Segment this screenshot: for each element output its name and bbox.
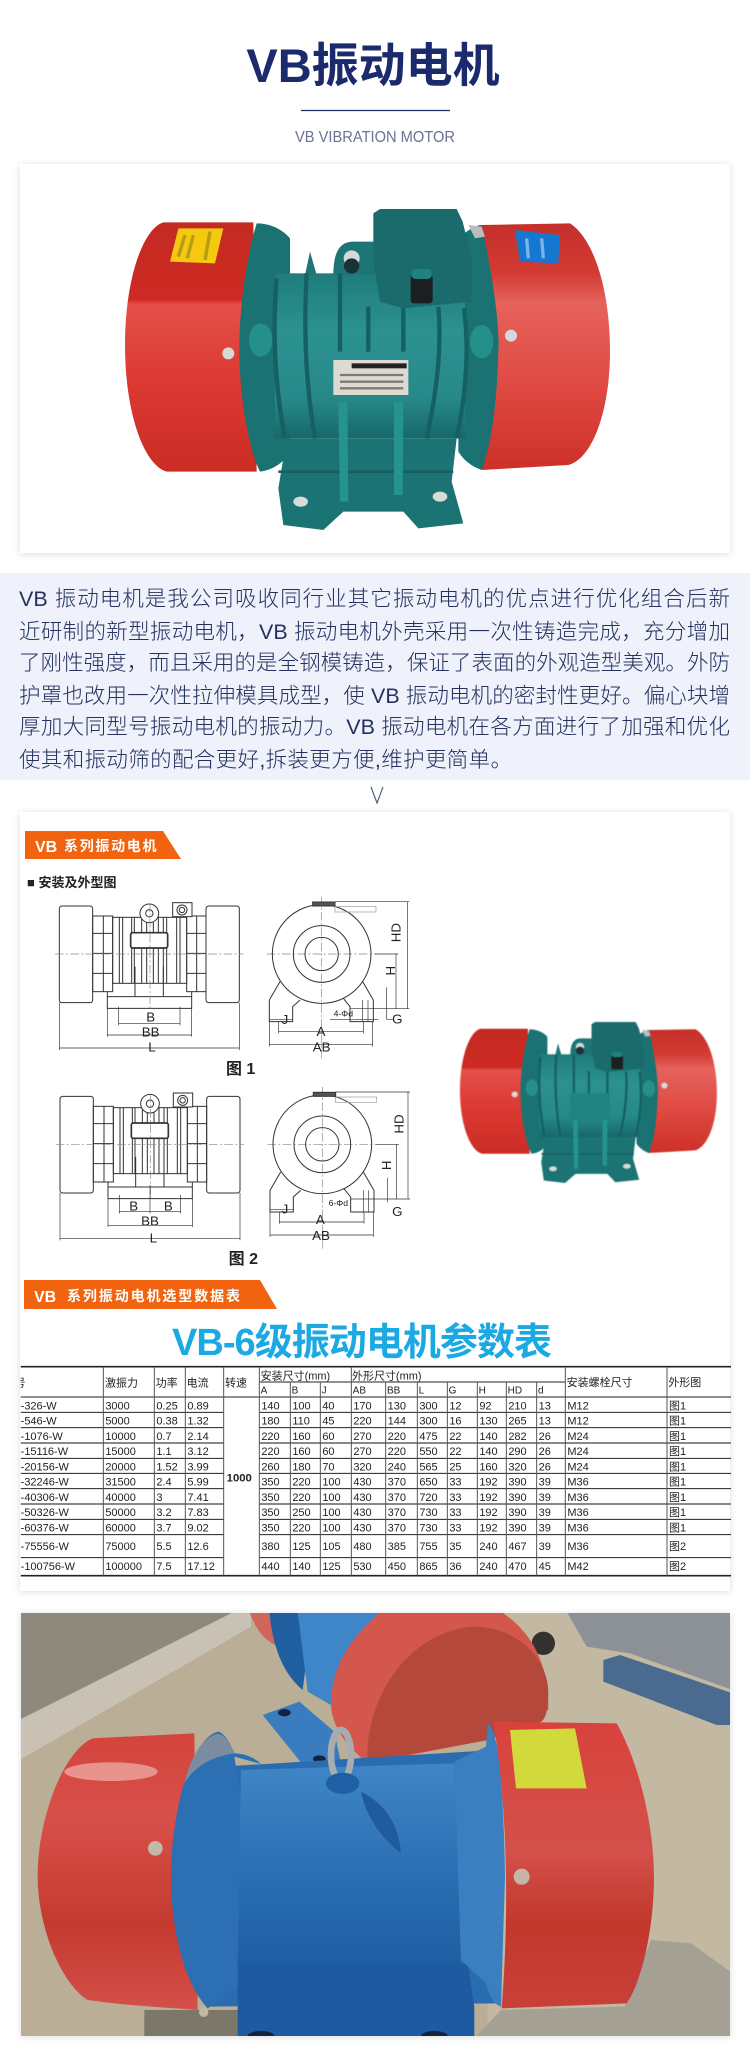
table rows: M24 [567,1431,589,1443]
table header: G [449,1386,457,1397]
table rows: 图2 [669,1560,686,1573]
table rows: 350 [261,1522,280,1534]
table rows: 70 [322,1461,335,1473]
front motor: right drum [493,1722,654,2008]
table rows: M12 [567,1401,589,1413]
table header: 安装螺栓尺寸 [567,1375,633,1389]
table rows: 220 [388,1446,406,1458]
table rows: 370 [388,1522,406,1534]
table rows: 26 [539,1446,551,1458]
table header: HD [508,1386,522,1397]
table rows: 390 [508,1492,527,1504]
table rows: 图1 [669,1491,686,1504]
table rows: 475 [419,1431,438,1443]
labels: figure 1 dimensions: 4-Φd [334,1009,353,1019]
panel: field photo of blue motors [21,1613,730,2036]
ground shadow lower right [474,1940,733,2038]
table rows: 140 [479,1446,498,1458]
table rows [21,1400,686,1573]
table rows: -100756-W [21,1561,76,1573]
table rows: 350 [261,1477,280,1489]
table rows: 7.41 [187,1492,209,1504]
table rows: -1076-W [21,1431,63,1443]
table rows: 12 [449,1401,462,1413]
table rows: 250 [292,1507,311,1519]
banner: VB series [25,831,181,859]
table rows: 470 [508,1561,527,1573]
table rows: 3.2 [156,1507,172,1519]
table rows: 2.14 [187,1431,209,1443]
table rows: 350 [261,1492,280,1504]
table rows: 240 [388,1461,406,1473]
table rows: 3000 [105,1401,130,1413]
table rows: 180 [261,1416,280,1428]
table rows: 192 [479,1492,498,1504]
table rows: 320 [508,1461,527,1473]
table rows: 265 [508,1416,527,1428]
table rows: -546-W [21,1416,57,1428]
labels: figure 1 dimensions: A [317,1024,326,1039]
table rows: 图1 [669,1476,686,1489]
flange interior [184,1734,234,1783]
table rows: 125 [322,1561,341,1573]
table rows: 100 [322,1477,341,1489]
table header: 安装尺寸(mm) [261,1368,330,1382]
table rows: 12.6 [187,1541,209,1553]
table rows: 430 [353,1507,372,1519]
illustration: small motor [460,1022,717,1183]
dark fitting [532,1632,555,1655]
table rows: M12 [567,1416,589,1428]
table rows: 图1 [669,1460,686,1473]
drawing: figure 2 [56,1087,410,1249]
icon: down chevron [370,786,384,804]
plank [19,1612,251,1760]
table header: 功率 [156,1376,178,1390]
table rows: 100000 [105,1561,142,1573]
table rows: 220 [292,1477,311,1489]
table rows: 26 [539,1431,551,1443]
table rows: 220 [261,1431,280,1443]
table rows: 650 [419,1477,438,1489]
table rows: 40000 [105,1492,136,1504]
table rows: 图1 [669,1400,686,1413]
table rows: 370 [388,1507,406,1519]
table rows: 210 [508,1401,527,1413]
table rows: 9.02 [187,1522,209,1534]
table rows: 60 [322,1446,335,1458]
title: VB振动电机 [246,39,500,92]
table rows: 192 [479,1507,498,1519]
text block: description: VB 振动电机是我公司吸收同行业其它振动电机的优点进行优化组合后新 [19,587,730,611]
table rows: 25 [449,1461,462,1473]
table rows: 1.52 [156,1461,178,1473]
table rows: 467 [508,1541,527,1553]
table rows: 1.32 [187,1416,209,1428]
table rows: 240 [479,1541,498,1553]
table rows: 220 [353,1416,372,1428]
table rows: 385 [388,1541,406,1553]
text block: description: 使其和振动筛的配合更好,拆装更方便,维护更简单。 [19,748,512,772]
table header: J [322,1386,327,1397]
table rows: 0.7 [156,1431,172,1443]
text block: description: 近研制的新型振动电机，VB 振动电机外壳采用一次性铸造完成，充分增加 [19,620,730,644]
merged speed cell: 1000 [227,1472,252,1484]
table header: AB [353,1386,366,1397]
heading: installation drawings: ■ 安装及外型图 [27,875,116,890]
table header: 外形尺寸(mm) [352,1368,422,1382]
labels: figure 1 dimensions: 图 1 [226,1061,255,1078]
front motor: backing [208,1750,498,2007]
table header: H [479,1386,486,1397]
labels: figure 2 dimensions [129,1114,406,1268]
yellow label [510,1728,587,1788]
rear motor [249,1612,548,1767]
panel: main product photo [20,164,730,553]
labels: figure 2 dimensions: HD [391,1114,406,1134]
front motor: left flange [171,1732,261,2008]
table rows: 100 [292,1401,311,1413]
text block: description: 了刚性强度，而且采用的是全钢模铸造，保证了表面的外观造型美观。外防 [19,651,730,675]
table rows: 7.83 [187,1507,209,1519]
table rows: 13 [539,1416,551,1428]
drum highlight [64,1762,158,1781]
table rows: 10000 [105,1431,136,1443]
table rows: 240 [479,1561,498,1573]
labels: figure 1 dimensions: B [146,1010,155,1025]
table rows: M36 [567,1492,589,1504]
table rows: 720 [419,1492,438,1504]
table header: A [261,1386,268,1397]
table rows: 100 [322,1507,341,1519]
table title: VB-6级振动电机参数表 [172,1322,552,1364]
table rows: 3.12 [187,1446,209,1458]
illustration: VB vibration motor [125,209,610,530]
label: yellow warning [170,228,223,263]
table rows: 130 [388,1401,406,1413]
front motor: left drum [38,1733,198,2010]
table rows: 390 [508,1477,527,1489]
table rows: 430 [353,1492,372,1504]
table rows: 22 [449,1431,462,1443]
table rows: 480 [353,1541,372,1553]
table rows: 92 [479,1401,492,1413]
header: title block [246,39,500,146]
table rows: 125 [292,1541,311,1553]
table rows: 35 [449,1541,462,1553]
text block: description: 护罩也改用一次性拉伸模具成型，使 VB 振动电机的密封性更好。偏心块增 [19,684,730,708]
labels: figure 2 dimensions: 6-Φd [329,1198,348,1208]
front motor: right band [454,1723,505,2007]
table rows: 33 [449,1492,462,1504]
table rows: 192 [479,1522,498,1534]
table rows: 220 [292,1522,311,1534]
table rows: 13 [539,1401,551,1413]
table rows: -75556-W [21,1541,70,1553]
labels: figure 2 dimensions: J [282,1201,288,1216]
table rows: 60000 [105,1522,136,1534]
table rows: 160 [292,1431,311,1443]
banner: VB series: VB [35,839,57,856]
table rows: 140 [261,1401,280,1413]
text block: description [19,587,730,772]
table rows: 220 [261,1446,280,1458]
front motor: base [238,1963,474,2038]
table rows: 3.99 [187,1461,209,1473]
machinery background [567,1612,733,1725]
table rows: 565 [419,1461,438,1473]
table header: L [419,1386,425,1397]
table rows: 530 [353,1561,372,1573]
table rows: 110 [292,1416,310,1428]
table header: BB [387,1386,401,1397]
table rows: 26 [539,1461,551,1473]
table rows: 160 [479,1461,498,1473]
ground right tone [488,1612,733,2038]
upper-left concrete [19,1612,234,1720]
table rows: 33 [449,1522,462,1534]
parameter table [15,1367,731,1576]
table rows: 390 [508,1522,527,1534]
table rows: 17.12 [187,1561,215,1573]
table rows: 180 [292,1461,311,1473]
photo scene [19,1612,733,2041]
table rows: 图1 [669,1430,686,1443]
table rows: 220 [292,1492,311,1504]
table rows: 图1 [669,1521,686,1534]
table rows: 图1 [669,1415,686,1428]
table rows: 260 [261,1461,280,1473]
table rows: 45 [322,1416,335,1428]
table header: B [292,1386,299,1397]
table rows: 170 [353,1401,372,1413]
table rows: 39 [539,1477,551,1489]
bolts [148,1841,530,2017]
drawing: figure 1 [55,897,409,1058]
table rows: 865 [419,1561,438,1573]
table rows: 730 [419,1507,438,1519]
table rows: 0.38 [156,1416,178,1428]
labels: figure 1 dimensions: L [148,1040,156,1055]
table rows: 图2 [669,1540,686,1553]
table rows: 40 [322,1401,335,1413]
ground [19,1612,733,2038]
table rows: M42 [567,1561,589,1573]
table rows: 220 [388,1431,406,1443]
banner: selection table: 系列振动电机选型数据表 [67,1288,242,1304]
table header: 外形图 [668,1376,701,1389]
panel: description background [0,573,750,780]
table rows: 550 [419,1446,438,1458]
panel: drawings and parameter table [20,812,730,1591]
table rows: 390 [508,1507,527,1519]
table header: 电流 [187,1376,209,1390]
table rows: 270 [353,1446,372,1458]
table rows: 2.4 [156,1477,172,1489]
text block: description: 厚加大同型号振动电机的振动力。VB 振动电机在各方面进行了加强和优化 [19,715,730,739]
table header [20,1370,700,1394]
table rows: -20156-W [21,1461,70,1473]
labels: figure 2 dimensions: L [150,1230,157,1245]
table rows: 320 [353,1461,372,1473]
table rows: 144 [388,1416,406,1428]
table rows: 140 [479,1431,498,1443]
table rows: 0.25 [156,1401,178,1413]
table rows: 290 [508,1446,527,1458]
labels: figure 2 dimensions: 图 2 [229,1251,258,1268]
table rows: M36 [567,1541,589,1553]
lifting eye [326,1730,359,1794]
eye shadow [361,1792,401,1853]
labels: figure 1 dimensions: AB [313,1039,331,1054]
table rows: 270 [353,1431,372,1443]
table rows: 33 [449,1507,462,1519]
table rows: 380 [261,1541,280,1553]
table rows: 440 [261,1561,280,1573]
table rows: 430 [353,1477,372,1489]
table rows: -326-W [21,1401,57,1413]
table rows: 16 [449,1416,462,1428]
table header: 转速 [225,1376,247,1390]
labels: figure 1 dimensions: J [282,1012,288,1027]
subtitle: VB VIBRATION MOTOR [295,129,455,146]
table rows: 350 [261,1507,280,1519]
table rows: 45 [539,1561,551,1573]
table rows: 22 [449,1446,462,1458]
table header: d [538,1386,544,1397]
table rows: 图1 [669,1445,686,1458]
teal plate [570,1093,610,1120]
table rows: 0.89 [187,1401,209,1413]
table rows: 36 [449,1561,462,1573]
table rows: 140 [292,1561,311,1573]
table rows: 300 [419,1401,438,1413]
table rows: M24 [567,1446,589,1458]
labels: figure 2 dimensions: H [379,1161,394,1170]
front motor: body [238,1763,461,1963]
table rows: -60376-W [21,1522,70,1534]
table rows: 15000 [105,1446,136,1458]
table rows: 5000 [105,1416,130,1428]
table rows: 3.7 [156,1522,172,1534]
labels: figure 2 dimensions: BB [141,1213,159,1228]
table rows: -40306-W [21,1492,70,1504]
labels: figure 2 dimensions: B [129,1199,138,1214]
banner: selection table [24,1280,277,1309]
table rows: 39 [539,1522,551,1534]
table rows: 730 [419,1522,438,1534]
table rows: 192 [479,1477,498,1489]
table rows: 39 [539,1507,551,1519]
table rows: 755 [419,1541,438,1553]
table rows: 图1 [669,1506,686,1519]
banner: selection table: VB [34,1289,56,1306]
table rows: 3 [156,1492,162,1504]
table rows: 5.99 [187,1477,209,1489]
table rows: M36 [567,1507,589,1519]
table rows: 75000 [105,1541,136,1553]
table rows: -15116-W [21,1446,69,1458]
table rows: 50000 [105,1507,136,1519]
banner: VB series: 系列振动电机 [64,838,158,854]
ground shadow under motor [144,2010,239,2038]
labels: figure 2 dimensions: AB [312,1228,330,1243]
labels: figure 2 dimensions: G [392,1204,403,1219]
table rows: 60 [322,1431,335,1443]
table rows: -50326-W [21,1507,70,1519]
nameplate [333,360,408,395]
table rows: 7.5 [156,1561,172,1573]
table rows: 370 [388,1492,406,1504]
table rows: 31500 [105,1477,136,1489]
table rows: 300 [419,1416,438,1428]
table rows: 282 [508,1431,527,1443]
table rows: -32246-W [21,1477,70,1489]
table rows: 105 [322,1541,341,1553]
labels: figure 1 dimensions: H [383,966,398,975]
labels: figure 1 dimensions: HD [389,923,404,942]
table rows: 430 [353,1522,372,1534]
labels: figure 2 dimensions: B [164,1199,173,1214]
label: blue info [515,230,560,263]
table rows: 160 [292,1446,311,1458]
table rows: M24 [567,1461,589,1473]
labels: figure 2 dimensions: A [316,1212,325,1227]
table rows: 1.1 [156,1446,172,1458]
table rows: 33 [449,1477,462,1489]
table rows: 130 [479,1416,498,1428]
table rows: 100 [322,1522,341,1534]
table header: 激振力 [105,1376,138,1390]
mounting holes [248,2031,448,2041]
table rows: 39 [539,1492,551,1504]
table rows: 370 [388,1477,406,1489]
table rows: 450 [388,1561,406,1573]
table rows: M36 [567,1477,589,1489]
labels: figure 1 dimensions: G [392,1011,403,1026]
table rows: 5.5 [156,1541,172,1553]
table rows: M36 [567,1522,589,1534]
table rows: 100 [322,1492,341,1504]
labels: figure 1 dimensions [142,923,404,1078]
labels: figure 1 dimensions: BB [142,1025,160,1040]
table rows: 20000 [105,1461,136,1473]
table rows: 39 [539,1541,551,1553]
